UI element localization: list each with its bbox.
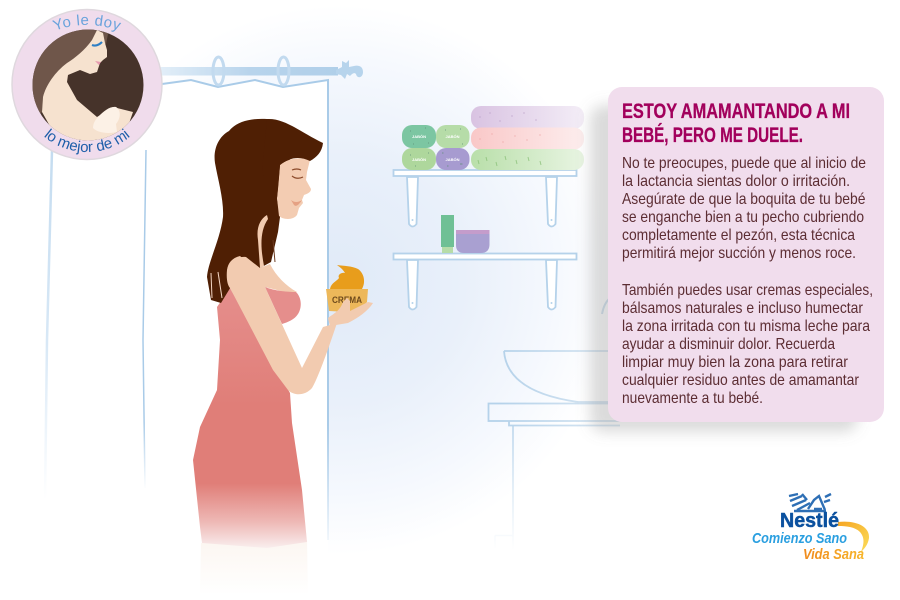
dress bust xyxy=(265,287,301,324)
curtain rod xyxy=(160,57,363,85)
towels xyxy=(471,106,584,170)
torso skin xyxy=(227,257,297,300)
cream jar xyxy=(456,230,490,253)
soaps: JABÓN xyxy=(412,134,426,139)
badge text top: Yo le doy xyxy=(52,14,122,32)
paragraph one: completamente el pezón, esta técnica xyxy=(622,227,855,244)
paragraph two: limpiar muy bien la zona para retirar xyxy=(622,354,849,371)
soaps: JABÓN xyxy=(445,157,460,162)
Comienzo Sano: Comienzo Sano xyxy=(752,530,847,547)
soaps xyxy=(402,125,470,170)
curtain xyxy=(40,80,328,570)
cream tube xyxy=(441,215,454,253)
mother's skin xyxy=(42,30,133,145)
neck strip xyxy=(257,215,268,268)
paragraph one xyxy=(622,155,866,262)
swoosh xyxy=(838,522,869,552)
Vida Sana: Vida Sana xyxy=(803,546,864,563)
paragraph two: ayudar a disminuir dolor. Recuerda xyxy=(622,336,835,353)
woman with cream xyxy=(193,119,373,595)
legs xyxy=(200,540,308,595)
badge inner circle xyxy=(32,30,144,140)
paragraph one: se enganche bien a tu pecho cubriendo xyxy=(622,209,864,226)
fringe xyxy=(262,119,323,198)
badge text bottom: lo mejor de mi xyxy=(44,128,130,154)
face xyxy=(277,158,311,219)
icon: nest with birds xyxy=(789,494,831,511)
heading: BEBÉ, PERO ME DUELE. xyxy=(622,124,803,147)
hair strand gaps xyxy=(211,272,222,298)
panel: text card xyxy=(608,87,884,422)
upper shelf xyxy=(394,170,576,226)
cream jar in hand xyxy=(326,265,368,312)
lower shelf xyxy=(394,254,576,310)
panel shadow xyxy=(590,105,858,432)
closed eye xyxy=(92,42,102,46)
paragraph one: No te preocupes, puede que al inicio de xyxy=(622,155,866,172)
Nestlé wordmark: Nestlé xyxy=(780,509,839,532)
faucet xyxy=(602,298,610,314)
paragraph one: Asegúrate de que la boquita de tu bebé xyxy=(622,191,866,208)
lips xyxy=(291,200,302,206)
badge: Yo le doy lo mejor de mi xyxy=(11,8,163,160)
mother's hair xyxy=(32,30,108,114)
logo: Nestlé Comienzo Sano Vida Sana xyxy=(752,494,869,563)
hair xyxy=(207,119,290,303)
paragraph two: bálsamos naturales e incluso humectar xyxy=(622,300,864,317)
baby xyxy=(93,107,120,133)
heading xyxy=(622,100,850,147)
paragraph two: la zona irritada con tu misma leche para xyxy=(622,318,870,335)
paragraph one: la lactancia sientas dolor o irritación. xyxy=(622,173,850,190)
paragraph two: cualquier residuo antes de amamantar xyxy=(622,372,860,389)
sink leg xyxy=(495,426,513,550)
dress xyxy=(193,288,307,548)
paragraph two: nuevamente a tu bebé. xyxy=(622,390,763,407)
paragraph two xyxy=(622,282,873,407)
lips xyxy=(95,61,101,65)
closed eye and lips xyxy=(292,169,303,178)
sink xyxy=(488,351,620,426)
soaps: JABÓN xyxy=(412,157,426,162)
hair wisp xyxy=(273,240,275,262)
arm xyxy=(227,256,337,394)
hand xyxy=(328,298,373,326)
cream jar in hand: CREMA xyxy=(332,295,362,305)
paragraph one: permitirá mejor succión y menos roce. xyxy=(622,245,856,262)
soaps: JABÓN xyxy=(445,134,460,139)
